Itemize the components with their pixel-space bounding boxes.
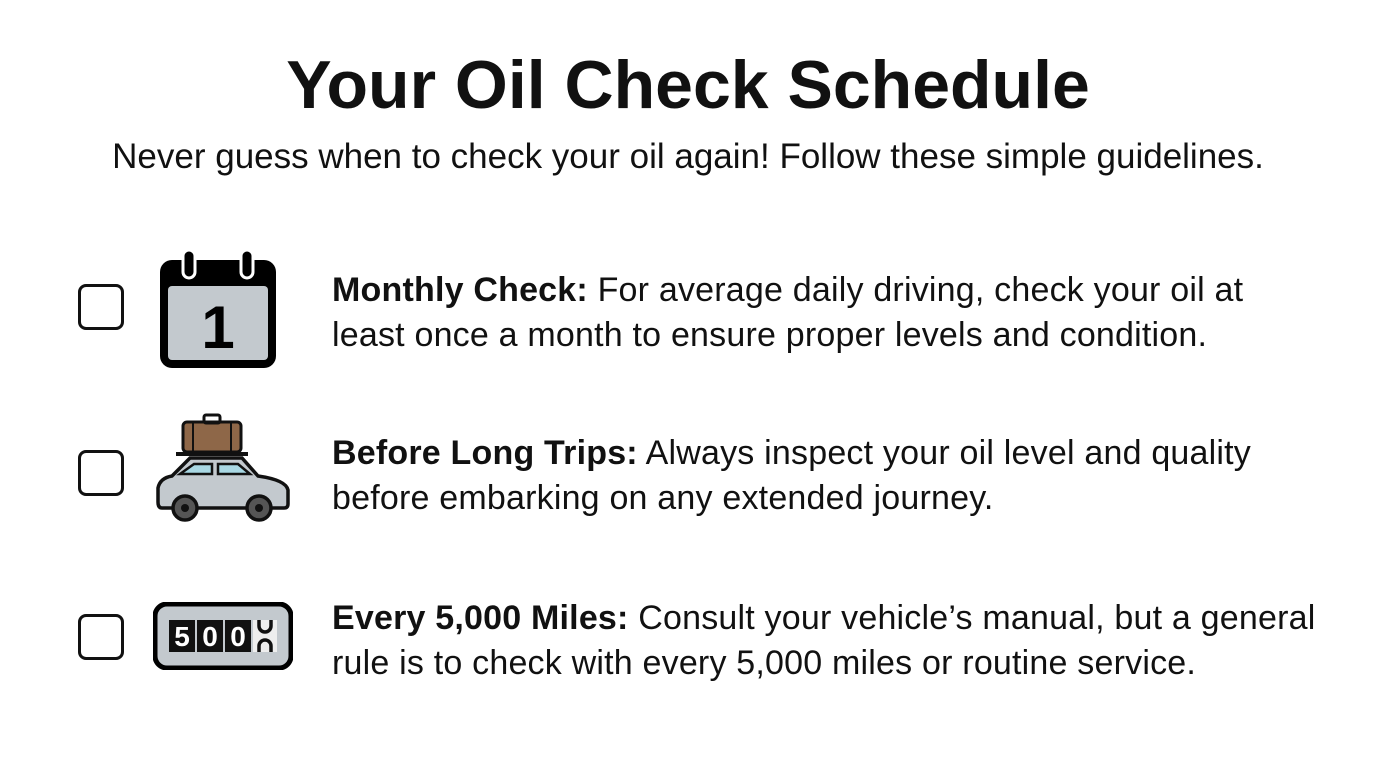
text 2 (332, 434, 1251, 517)
subtitle: Never guess when to check your oil again! Follow these simple guidelines. (112, 137, 1264, 176)
icon: calendar: 1 (201, 294, 235, 361)
text 1 (332, 271, 1243, 354)
text 1: Monthly Check: For average daily driving, check your oil at (332, 271, 1243, 309)
icon: calendar (160, 252, 276, 368)
icon: car with luggage (156, 414, 290, 522)
icon: odometer (153, 602, 293, 670)
checkbox 2 (78, 450, 124, 496)
icon: odometer: 5 (174, 621, 190, 652)
text 3 (332, 599, 1315, 682)
text 2: before embarking on any extended journey. (332, 479, 994, 517)
icon: odometer: 0 (230, 621, 246, 652)
text 3: rule is to check with every 5,000 miles or routine service. (332, 644, 1196, 682)
title: Your Oil Check Schedule (286, 47, 1090, 123)
icon: odometer: 0 (202, 621, 218, 652)
text 3: Every 5,000 Miles: Consult your vehicle’s manual, but a general (332, 599, 1315, 637)
text 1: least once a month to ensure proper levels and condition. (332, 316, 1207, 354)
checkbox 1 (78, 284, 124, 330)
checkbox 3 (78, 614, 124, 660)
text 2: Before Long Trips: Always inspect your oil level and quality (332, 434, 1251, 472)
